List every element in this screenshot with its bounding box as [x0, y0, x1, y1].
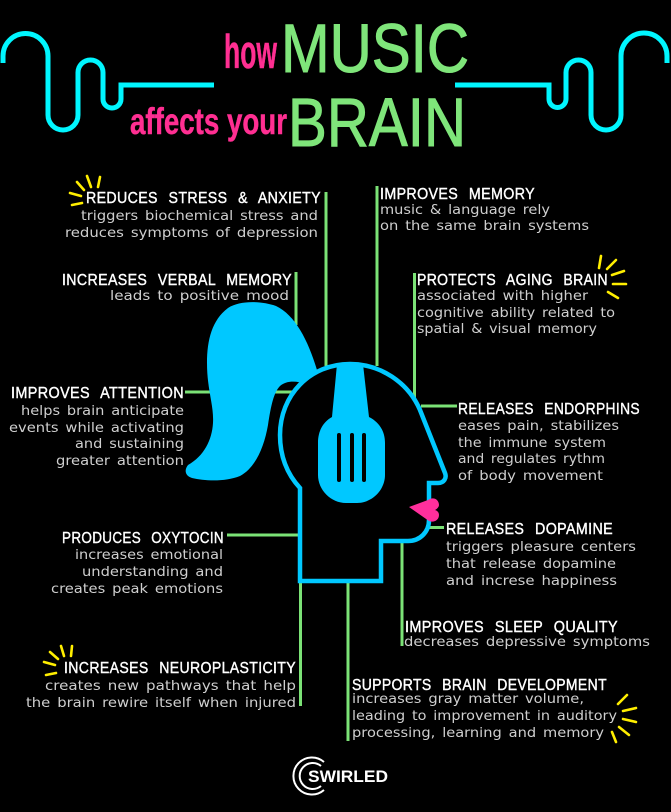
callout: improves memory: music & language rely	[380, 203, 550, 218]
callout: improves attention	[9, 385, 184, 469]
callout: releases endorphins: and regulates rythm	[458, 452, 605, 467]
callout: supports brain development	[352, 677, 617, 741]
callout: improves attention: helps brain anticipate	[21, 404, 184, 419]
callout: improves memory: IMPROVES MEMORY	[380, 186, 535, 203]
callout: produces oxytocin: PRODUCES OXYTOCIN	[62, 530, 224, 547]
title	[130, 10, 469, 161]
callout: protects aging brain: spatial & visual memory	[417, 322, 597, 337]
callout: improves attention: events while activating	[9, 421, 184, 436]
title: MUSIC: MUSIC	[281, 10, 469, 87]
callout: produces oxytocin: increases emotional	[75, 548, 223, 563]
callout: produces oxytocin: understanding and	[82, 565, 223, 580]
title: BRAIN: BRAIN	[288, 84, 466, 161]
lips	[409, 498, 439, 522]
callout: reduces stress: reduces symptoms of depression	[65, 226, 318, 241]
callout: releases endorphins	[458, 401, 640, 484]
callout: releases dopamine: that release dopamine	[446, 557, 616, 572]
callout: supports brain development: SUPPORTS BRAIN DEVELOPMENT	[352, 677, 607, 694]
icon: rays supports brain development	[612, 695, 636, 742]
logo wordmark: SWIRLED	[308, 768, 388, 786]
callout: improves sleep quality	[404, 619, 650, 650]
callout: improves memory	[380, 186, 589, 234]
callout: improves attention: and sustaining	[75, 437, 184, 452]
callout: produces oxytocin: creates peak emotions	[51, 582, 223, 597]
headphone slots	[337, 433, 366, 482]
callout: releases dopamine: triggers pleasure centers	[446, 540, 636, 555]
callout: increases neuroplasticity: creates new pathways that help	[45, 679, 296, 694]
callout: reduces stress	[65, 190, 321, 241]
callout: verbal memory: INCREASES VERBAL MEMORY	[62, 272, 292, 289]
callout: protects aging brain	[417, 272, 615, 337]
left sound wave	[3, 34, 214, 130]
callout: reduces stress: triggers biochemical stress and	[81, 209, 318, 224]
callout: verbal memory: leads to positive mood	[110, 289, 289, 304]
icon: rays protects aging brain	[599, 256, 626, 298]
callout: protects aging brain: PROTECTS AGING BRAIN	[417, 272, 608, 289]
headphones	[318, 364, 385, 503]
callout: verbal memory	[62, 272, 292, 304]
ponytail	[186, 302, 317, 480]
title: affects your: affects your	[130, 101, 287, 142]
callout: releases dopamine: and increse happiness	[446, 574, 617, 589]
callout: improves sleep quality: IMPROVES SLEEP QUALITY	[405, 619, 618, 636]
callout: protects aging brain: cognitive ability related to	[417, 306, 615, 321]
callout: releases dopamine	[446, 521, 636, 589]
callout: increases neuroplasticity: INCREASES NEUROPLASTICITY	[64, 660, 296, 677]
callout: releases dopamine: RELEASES DOPAMINE	[446, 521, 613, 538]
callout: improves attention: IMPROVES ATTENTION	[11, 385, 184, 402]
callout: supports brain development: leading to improvement in auditory	[352, 709, 617, 724]
callout: releases endorphins: of body movement	[458, 469, 603, 484]
callout: improves sleep quality: decreases depressive symptoms	[404, 635, 650, 650]
callout: produces oxytocin	[51, 530, 224, 597]
callout: improves memory: on the same brain systems	[380, 219, 589, 234]
callout: releases endorphins: RELEASES ENDORPHINS	[458, 401, 640, 418]
connector lines	[185, 186, 457, 741]
callout: releases endorphins: the immune system	[458, 436, 606, 451]
icon: rays reduces stress	[70, 176, 100, 205]
callout: releases endorphins: eases pain, stabilizes	[458, 419, 619, 434]
callout: improves attention: greater attention	[56, 454, 184, 469]
logo: swirled	[293, 758, 388, 794]
icon: rays increases neuroplasticity	[44, 646, 72, 675]
head outline	[280, 364, 446, 581]
title: how: how	[224, 25, 277, 78]
callout: reduces stress: REDUCES STRESS & ANXIETY	[86, 190, 321, 207]
callout: protects aging brain: associated with higher	[417, 289, 589, 304]
right sound wave	[455, 33, 667, 130]
callout: supports brain development: increases gray matter volume,	[352, 692, 584, 707]
callout: increases neuroplasticity	[26, 660, 296, 711]
callout: increases neuroplasticity: the brain rewire itself when injured	[26, 696, 296, 711]
logo swirl	[293, 758, 324, 794]
callout: supports brain development: processing, learning and memory	[352, 726, 604, 741]
